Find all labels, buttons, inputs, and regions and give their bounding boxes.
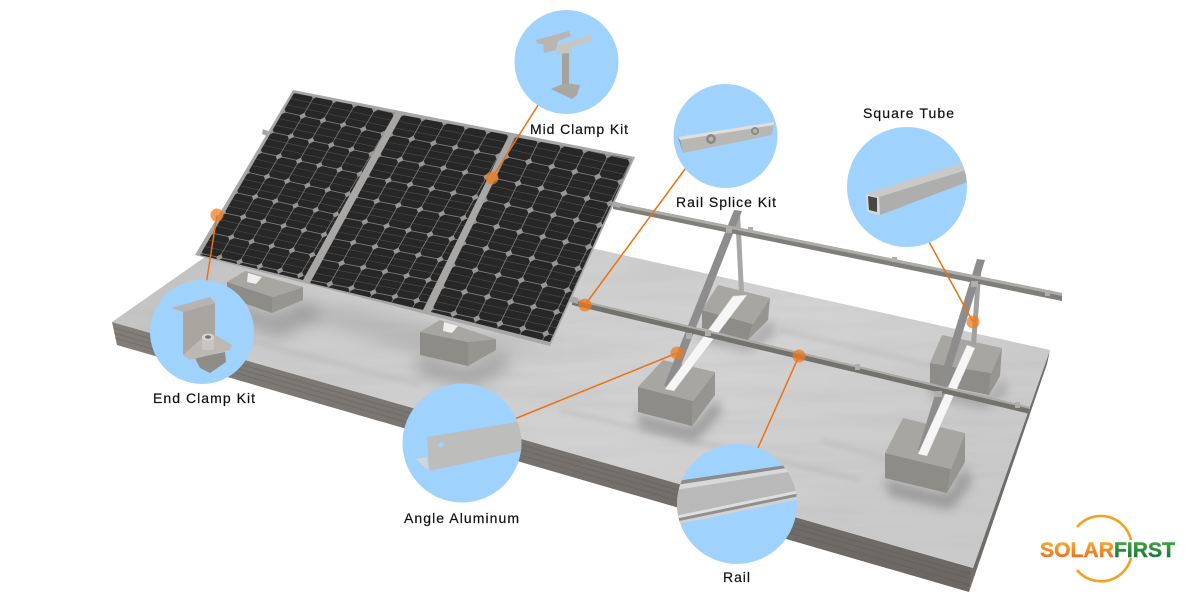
- rail clamps: [726, 227, 1050, 296]
- angle aluminum circle: [402, 384, 522, 502]
- concrete block back left: [702, 285, 770, 340]
- front leg: [664, 210, 742, 388]
- slab right side face: [969, 350, 1050, 592]
- orange marker dots: [210, 172, 980, 362]
- panel 2 backing: [310, 115, 509, 310]
- logo lower sun arc: [1077, 558, 1131, 581]
- panel 3 cell grid: [432, 137, 632, 340]
- mid clamp icon: [536, 31, 593, 99]
- leader lines: [206, 102, 973, 450]
- callout: square tube: [847, 105, 970, 247]
- callout: rail: [670, 444, 800, 585]
- end clamp circle: [150, 280, 254, 384]
- end clamp label: End Clamp Kit: [153, 390, 255, 406]
- logo: Solar First: [1040, 516, 1175, 581]
- rail splice circle: [674, 84, 778, 188]
- slab mottled texture: [112, 185, 1050, 568]
- dot: rail splice: [578, 298, 592, 312]
- rail leader: [757, 356, 799, 450]
- concrete roof slab: [112, 185, 1050, 592]
- square tube circle: [847, 127, 967, 247]
- concrete block under panel 1: [227, 271, 303, 313]
- callout: end clamp kit: [150, 280, 255, 406]
- callout: mid clamp kit: [514, 10, 628, 137]
- dot: rail: [792, 350, 806, 362]
- angle aluminum icon: [416, 421, 522, 471]
- rail icon: [677, 466, 797, 524]
- square tube leader: [928, 240, 973, 322]
- mid clamp label: Mid Clamp Kit: [530, 121, 628, 137]
- dot: angle aluminum: [670, 346, 684, 360]
- dot: mid clamp: [486, 172, 498, 184]
- angle aluminum leader: [512, 353, 677, 420]
- rail splice label: Rail Splice Kit: [676, 194, 776, 210]
- concrete block front right: [885, 418, 965, 493]
- callout: angle aluminum: [402, 384, 522, 526]
- panel 2 cell grid: [312, 115, 509, 310]
- slab front side face: [112, 322, 973, 592]
- shadows on slab: [225, 298, 1008, 510]
- left triangular bracket: [664, 210, 747, 391]
- angle aluminum label: Angle Aluminum: [404, 510, 519, 526]
- panel 1 backing: [200, 93, 395, 280]
- slab streaks: [150, 300, 960, 480]
- rail label: Rail: [723, 569, 750, 585]
- logo upper sun arc: [1077, 516, 1131, 540]
- back leg: [971, 262, 982, 345]
- back leg: [735, 212, 744, 292]
- dot: end clamp: [210, 208, 224, 222]
- rail splice leader: [585, 165, 688, 305]
- rail clamps: [686, 330, 1020, 408]
- aluminium frame: [195, 90, 635, 346]
- square tube label: Square Tube: [863, 105, 954, 121]
- dot: square tube: [966, 316, 980, 328]
- square tube icon: [866, 161, 970, 215]
- rear rail: [613, 202, 1062, 301]
- angle aluminum brace: [665, 295, 747, 391]
- mid clamp circle: [514, 10, 618, 114]
- rail splice icon: [678, 122, 774, 153]
- callout: rail splice kit: [674, 84, 778, 210]
- slab grain: [114, 328, 971, 585]
- panel support feet: [247, 273, 458, 333]
- angle aluminum brace: [918, 345, 975, 456]
- panel 3 backing: [431, 137, 632, 342]
- front rail: [572, 298, 1030, 414]
- slab top surface: [112, 185, 1050, 568]
- concrete block back right: [930, 335, 1002, 395]
- end clamp leader: [206, 215, 217, 285]
- end clamp icon: [171, 297, 232, 373]
- panel 1 cell grid: [200, 93, 395, 279]
- right triangular bracket: [918, 259, 985, 456]
- concrete block under panel 2: [420, 320, 496, 366]
- mid clamp leader: [492, 102, 540, 178]
- solar panel array: [195, 90, 635, 346]
- logo wordmark: SOLARFIRST: [1040, 539, 1175, 562]
- front leg: [918, 259, 985, 452]
- frame nubs: [262, 129, 620, 304]
- rail circle: [677, 444, 797, 564]
- concrete block front left: [638, 360, 715, 426]
